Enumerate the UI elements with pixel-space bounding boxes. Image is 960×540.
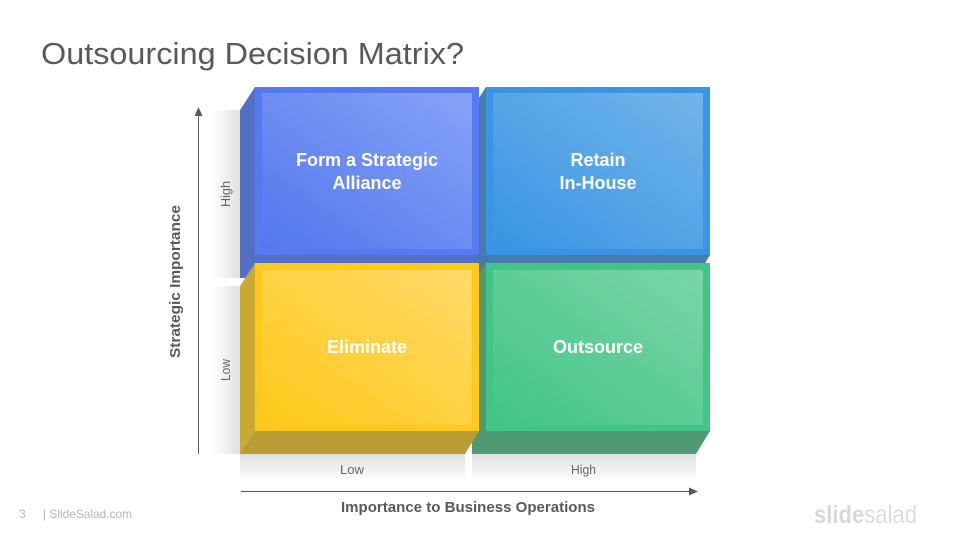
footer: site name: | SlideSalad.com	[43, 507, 132, 521]
label: Alliance	[332, 173, 402, 193]
quadrant: Retain In-House	[471, 87, 710, 278]
label: Form a Strategic	[296, 150, 438, 170]
axis band: High	[472, 454, 696, 482]
axis band: Low: Low	[340, 463, 365, 477]
axis title: Importance to Business Operations: Importance to Business Operations	[341, 499, 595, 516]
logo: slidesalad: slidesalad	[814, 501, 917, 529]
arrow: horizontal axis	[241, 488, 698, 496]
axis band: Low: Low	[219, 358, 233, 381]
axis band: Low	[240, 454, 465, 482]
label: Retain	[570, 150, 626, 170]
vertical axis: Strategic Importance	[167, 107, 240, 454]
arrow: vertical axis	[194, 107, 202, 454]
axis band: High: High	[219, 181, 233, 207]
label: In-House	[559, 173, 637, 193]
label: Eliminate	[327, 337, 407, 357]
quadrant: Outsource	[472, 263, 710, 454]
horizontal axis: Importance to Business Operations	[240, 454, 698, 516]
axis title: Strategic Importance: Strategic Importance	[167, 205, 184, 358]
axis band: Low	[212, 286, 240, 454]
axis band: High	[212, 110, 240, 278]
footer: page number: 3	[19, 507, 26, 521]
axis band: High: High	[571, 463, 596, 477]
title: Outsourcing Decision Matrix?	[41, 36, 464, 71]
quadrant: Eliminate	[240, 263, 479, 454]
quadrant: Form a Strategic Alliance	[240, 87, 479, 278]
label: Outsource	[553, 337, 643, 357]
